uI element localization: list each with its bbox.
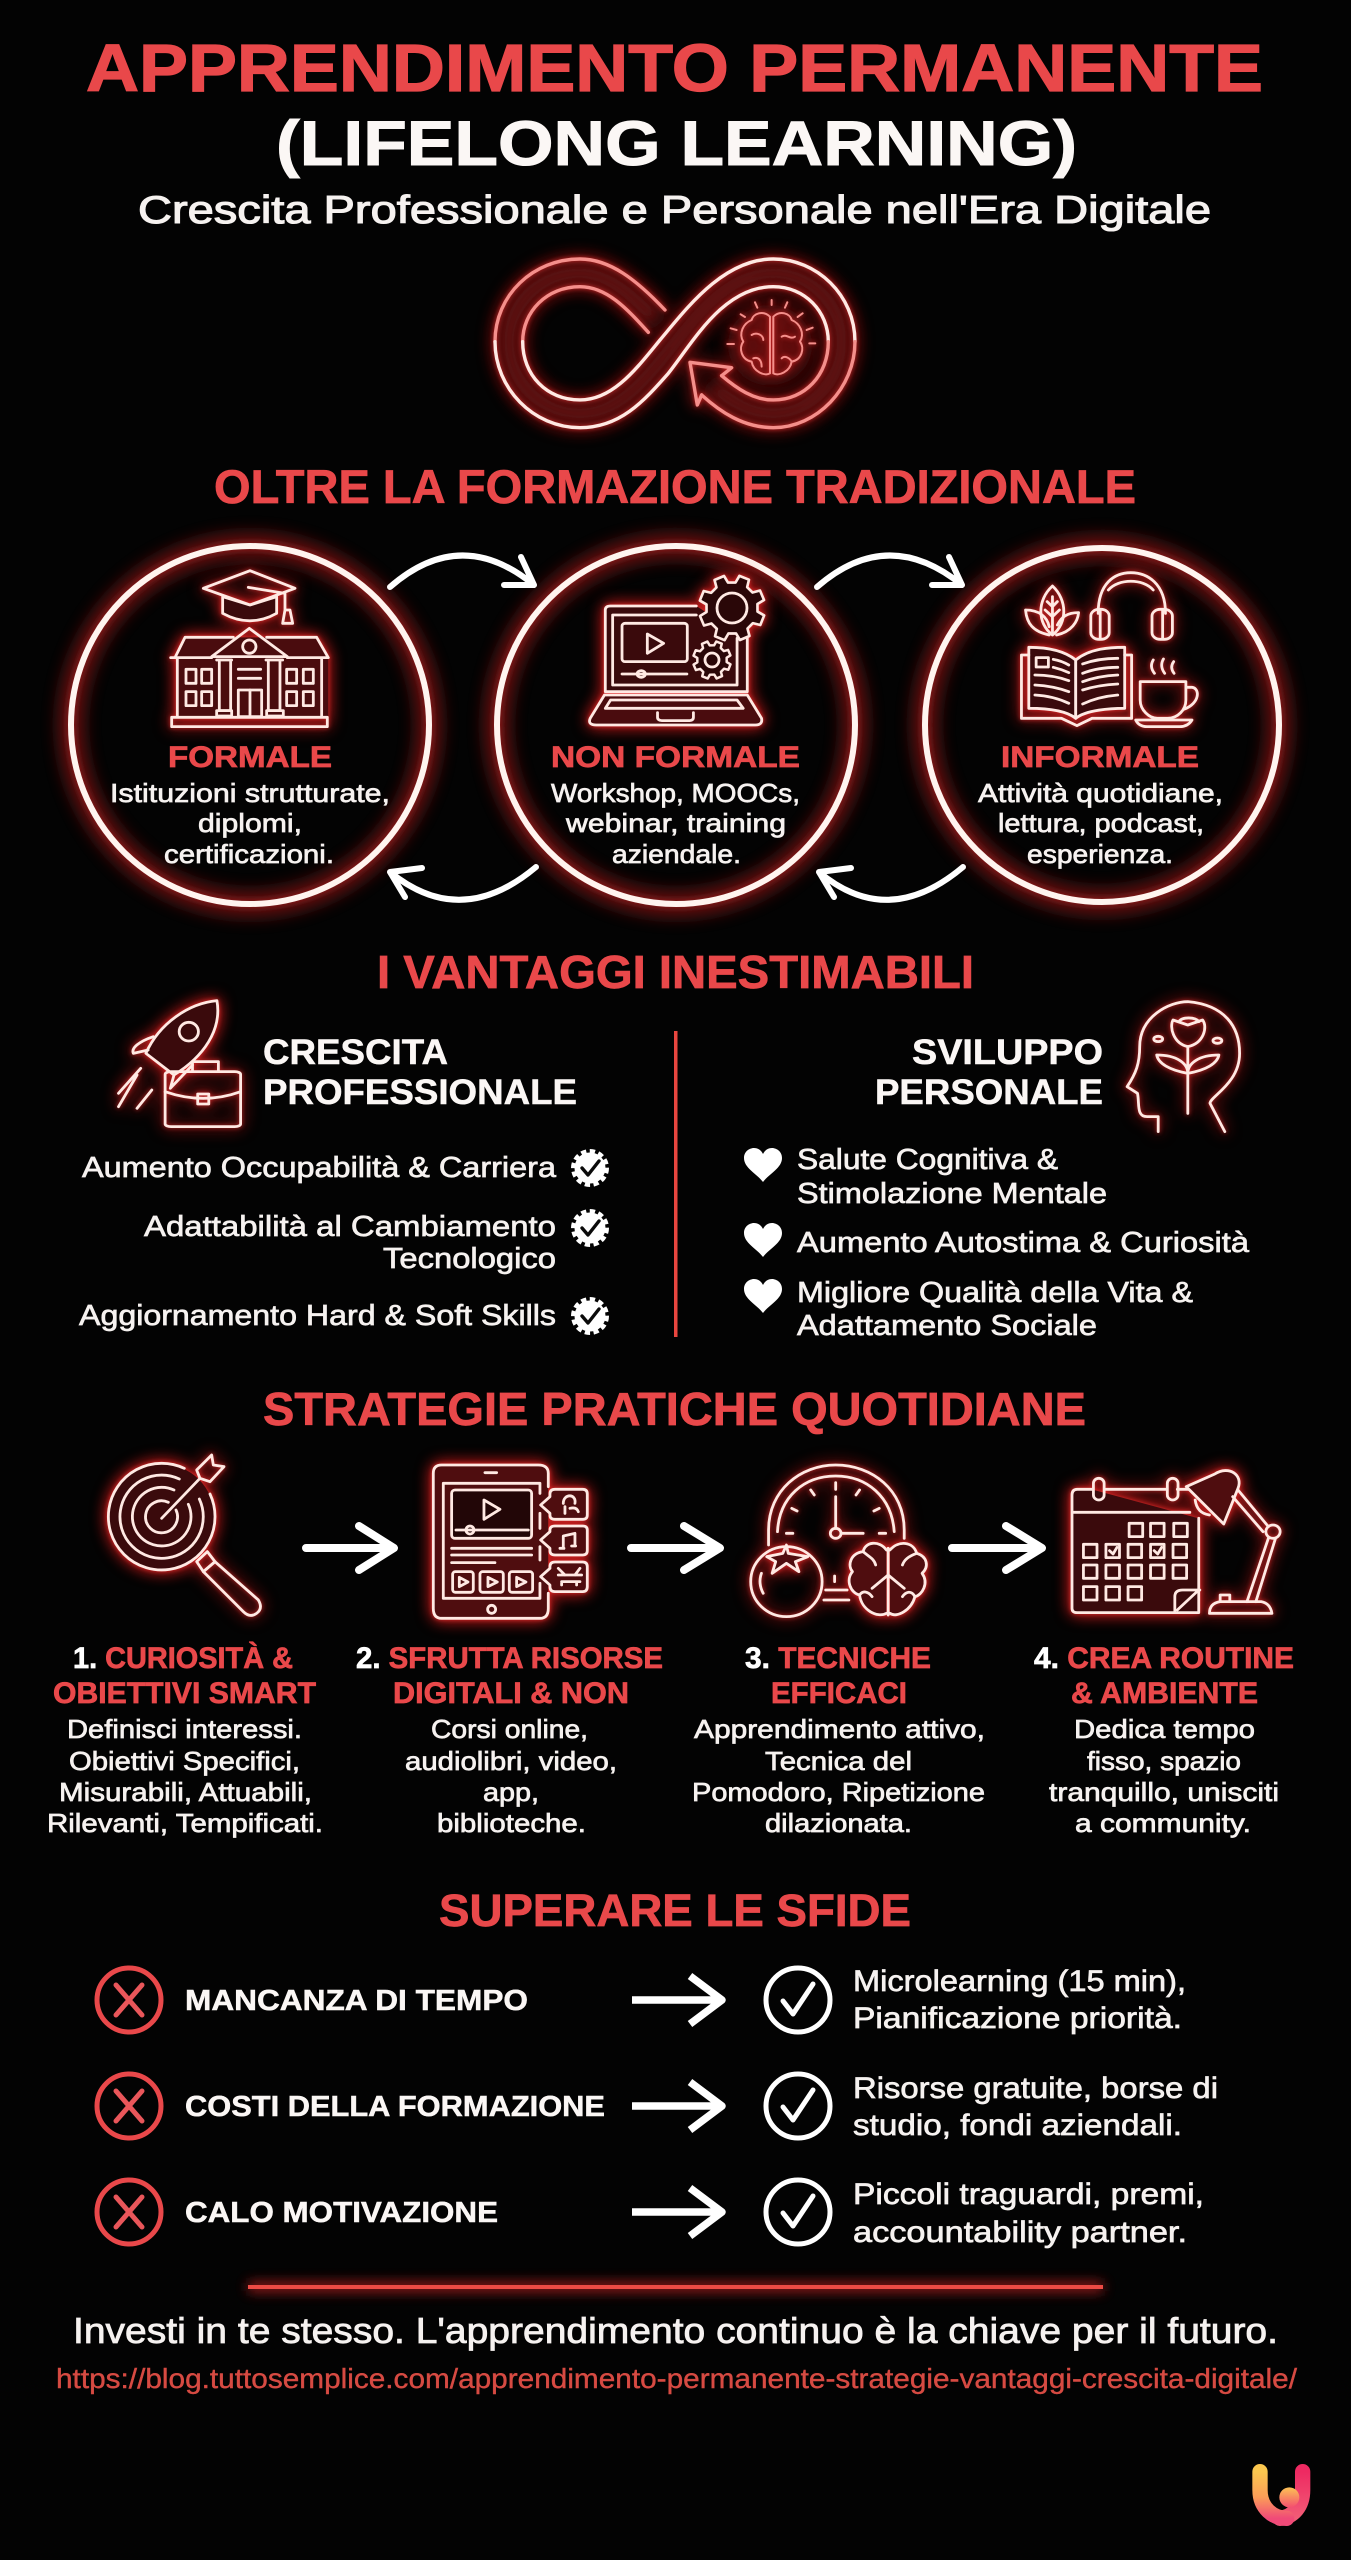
- arrow: step 1 to 2: [306, 1526, 394, 1570]
- heading: crescita professionale: CRESCITA: [263, 1033, 448, 1072]
- panel: formale: FORMALE: [168, 741, 332, 774]
- step 4: Dedica tempo: [1074, 1714, 1255, 1744]
- challenge row: costi: studio, fondi aziendali.: [853, 2109, 1182, 2142]
- arrow: informale to non formale: [819, 867, 963, 900]
- step 4: [1034, 1642, 1294, 1838]
- panel: formale: diplomi,: [198, 808, 302, 838]
- step 1: 1. CURIOSITÀ &: [73, 1641, 293, 1675]
- source url: https://blog.tuttosemplice.com/apprendimento-permanente-strategie-vantaggi-crescita-digitale/: [56, 2363, 1297, 2394]
- icon: infinity loop with brain: [495, 259, 855, 428]
- panel: non formale: aziendale.: [612, 839, 741, 869]
- step 2: [356, 1642, 663, 1838]
- step 2: DIGITALI & NON: [393, 1677, 629, 1710]
- step 1: OBIETTIVI SMART: [53, 1677, 316, 1710]
- title: APPRENDIMENTO PERMANENTE: [86, 31, 1263, 106]
- footer divider: [248, 2282, 1103, 2292]
- step 3: Apprendimento attivo,: [694, 1714, 985, 1744]
- heading: i vantaggi inestimabili: I VANTAGGI INESTIMABILI: [377, 946, 974, 998]
- step 2: 2. SFRUTTA RISORSE: [356, 1642, 663, 1675]
- challenge row: motivazione: accountability partner.: [853, 2216, 1187, 2249]
- arrow: step 3 to 4: [952, 1526, 1042, 1570]
- arrow: step 2 to 3: [631, 1526, 720, 1570]
- step 1: Rilevanti, Tempificati.: [47, 1808, 323, 1838]
- arrow: non formale to informale: [817, 555, 962, 587]
- challenge row: costi: [97, 2072, 1218, 2142]
- panel: non formale: webinar, training: [565, 808, 786, 838]
- challenge row: motivazione: Piccoli traguardi, premi,: [853, 2178, 1204, 2211]
- panel: formale: Istituzioni strutturate,: [110, 778, 390, 808]
- panel: informale: esperienza.: [1027, 839, 1173, 869]
- heading: strategie pratiche quotidiane: STRATEGIE PRATICHE QUOTIDIANE: [263, 1383, 1086, 1435]
- step 4: 4. CREA ROUTINE: [1034, 1642, 1294, 1675]
- icon: laptop with gears: [590, 566, 774, 725]
- icon: target with magnifier: [108, 1455, 260, 1615]
- challenge row: motivazione: [97, 2178, 1204, 2249]
- panel: informale: [925, 548, 1279, 902]
- challenge row: tempo: Microlearning (15 min),: [853, 1965, 1186, 1998]
- icon: logo: [1260, 2472, 1303, 2518]
- panel: informale: lettura, podcast,: [998, 808, 1204, 838]
- icon: calendar and desk lamp: [1072, 1471, 1280, 1613]
- panel: informale: Attività quotidiane,: [978, 778, 1223, 808]
- heading: oltre la formazione tradizionale: OLTRE LA FORMAZIONE TRADIZIONALE: [214, 460, 1136, 513]
- panel: formale: certificazioni.: [164, 839, 334, 869]
- step 4: a community.: [1075, 1808, 1251, 1838]
- challenge row: tempo: [97, 1965, 1186, 2035]
- panel: non formale: [497, 546, 855, 904]
- step 3: EFFICACI: [771, 1677, 907, 1710]
- step 4: & AMBIENTE: [1071, 1677, 1258, 1710]
- step 2: audiolibri, video,: [405, 1746, 617, 1776]
- heading: sviluppo personale: PERSONALE: [875, 1073, 1103, 1112]
- arrow: non formale to formale: [390, 867, 536, 900]
- icon: rocket and briefcase: [118, 1001, 241, 1127]
- list: personal benefits: Adattamento Sociale: [797, 1310, 1097, 1342]
- step 3: [692, 1642, 985, 1838]
- challenge row: motivazione: CALO MOTIVAZIONE: [185, 2197, 498, 2229]
- step 1: Misurabili, Attuabili,: [59, 1777, 312, 1807]
- challenge row: tempo: MANCANZA DI TEMPO: [185, 1985, 528, 2017]
- heading: crescita professionale: PROFESSIONALE: [263, 1073, 577, 1112]
- list: professional benefits: Aggiornamento Hard & Soft Skills: [79, 1300, 556, 1332]
- list: personal benefits: Migliore Qualità della Vita &: [797, 1277, 1193, 1309]
- list: professional benefits: [79, 1152, 606, 1332]
- panel: formale: [71, 546, 429, 904]
- title: [86, 31, 1263, 232]
- icon: school and graduation cap: [171, 571, 328, 727]
- step 3: dilazionata.: [765, 1808, 912, 1838]
- title: (LIFELONG LEARNING): [276, 109, 1077, 179]
- panel: non formale: Workshop, MOOCs,: [551, 778, 800, 808]
- step 4: tranquillo, unisciti: [1049, 1777, 1279, 1807]
- icon: clock, tomato, brain: [751, 1465, 926, 1617]
- icon: head with flower: [1127, 1002, 1240, 1132]
- step 2: Corsi online,: [431, 1714, 588, 1744]
- step 1: Obiettivi Specifici,: [69, 1746, 300, 1776]
- title: Crescita Professionale e Personale nell'Era Digitale: [138, 189, 1211, 232]
- list: personal benefits: [744, 1144, 1250, 1342]
- heading: sviluppo personale: SVILUPPO: [912, 1033, 1103, 1072]
- step 1: Definisci interessi.: [67, 1714, 302, 1744]
- challenge row: costi: Risorse gratuite, borse di: [853, 2072, 1218, 2105]
- step 2: biblioteche.: [437, 1808, 586, 1838]
- arrow: formale to non formale: [390, 555, 534, 587]
- list: personal benefits: Stimolazione Mentale: [797, 1178, 1107, 1210]
- step 2: app,: [483, 1777, 539, 1807]
- list: professional benefits: Adattabilità al Cambiamento: [144, 1211, 556, 1243]
- challenge row: costi: COSTI DELLA FORMAZIONE: [185, 2091, 605, 2123]
- closing statement: Investi in te stesso. L'apprendimento continuo è la chiave per il futuro.: [73, 2310, 1278, 2351]
- step 4: fisso, spazio: [1087, 1746, 1241, 1776]
- list: personal benefits: Salute Cognitiva &: [797, 1144, 1058, 1176]
- step 1: [47, 1641, 323, 1838]
- icon: tablet with media: [433, 1465, 587, 1618]
- panel: informale: INFORMALE: [1001, 741, 1199, 774]
- heading: superare le sfide: SUPERARE LE SFIDE: [439, 1885, 911, 1936]
- list: professional benefits: Aumento Occupabilità & Carriera: [82, 1152, 557, 1184]
- icon: book, plant, headphones, coffee: [1021, 573, 1197, 727]
- list: personal benefits: Aumento Autostima & Curiosità: [797, 1227, 1250, 1259]
- step 3: Tecnica del: [765, 1746, 912, 1776]
- heading: crescita professionale: [263, 1033, 577, 1112]
- challenge row: tempo: Pianificazione priorità.: [853, 2002, 1182, 2035]
- list: professional benefits: Tecnologico: [383, 1243, 556, 1275]
- step 3: Pomodoro, Ripetizione: [692, 1777, 985, 1807]
- step 3: 3. TECNICHE: [745, 1642, 931, 1675]
- divider: [674, 1031, 678, 1337]
- panel: non formale: NON FORMALE: [551, 741, 800, 774]
- heading: sviluppo personale: [875, 1033, 1103, 1112]
